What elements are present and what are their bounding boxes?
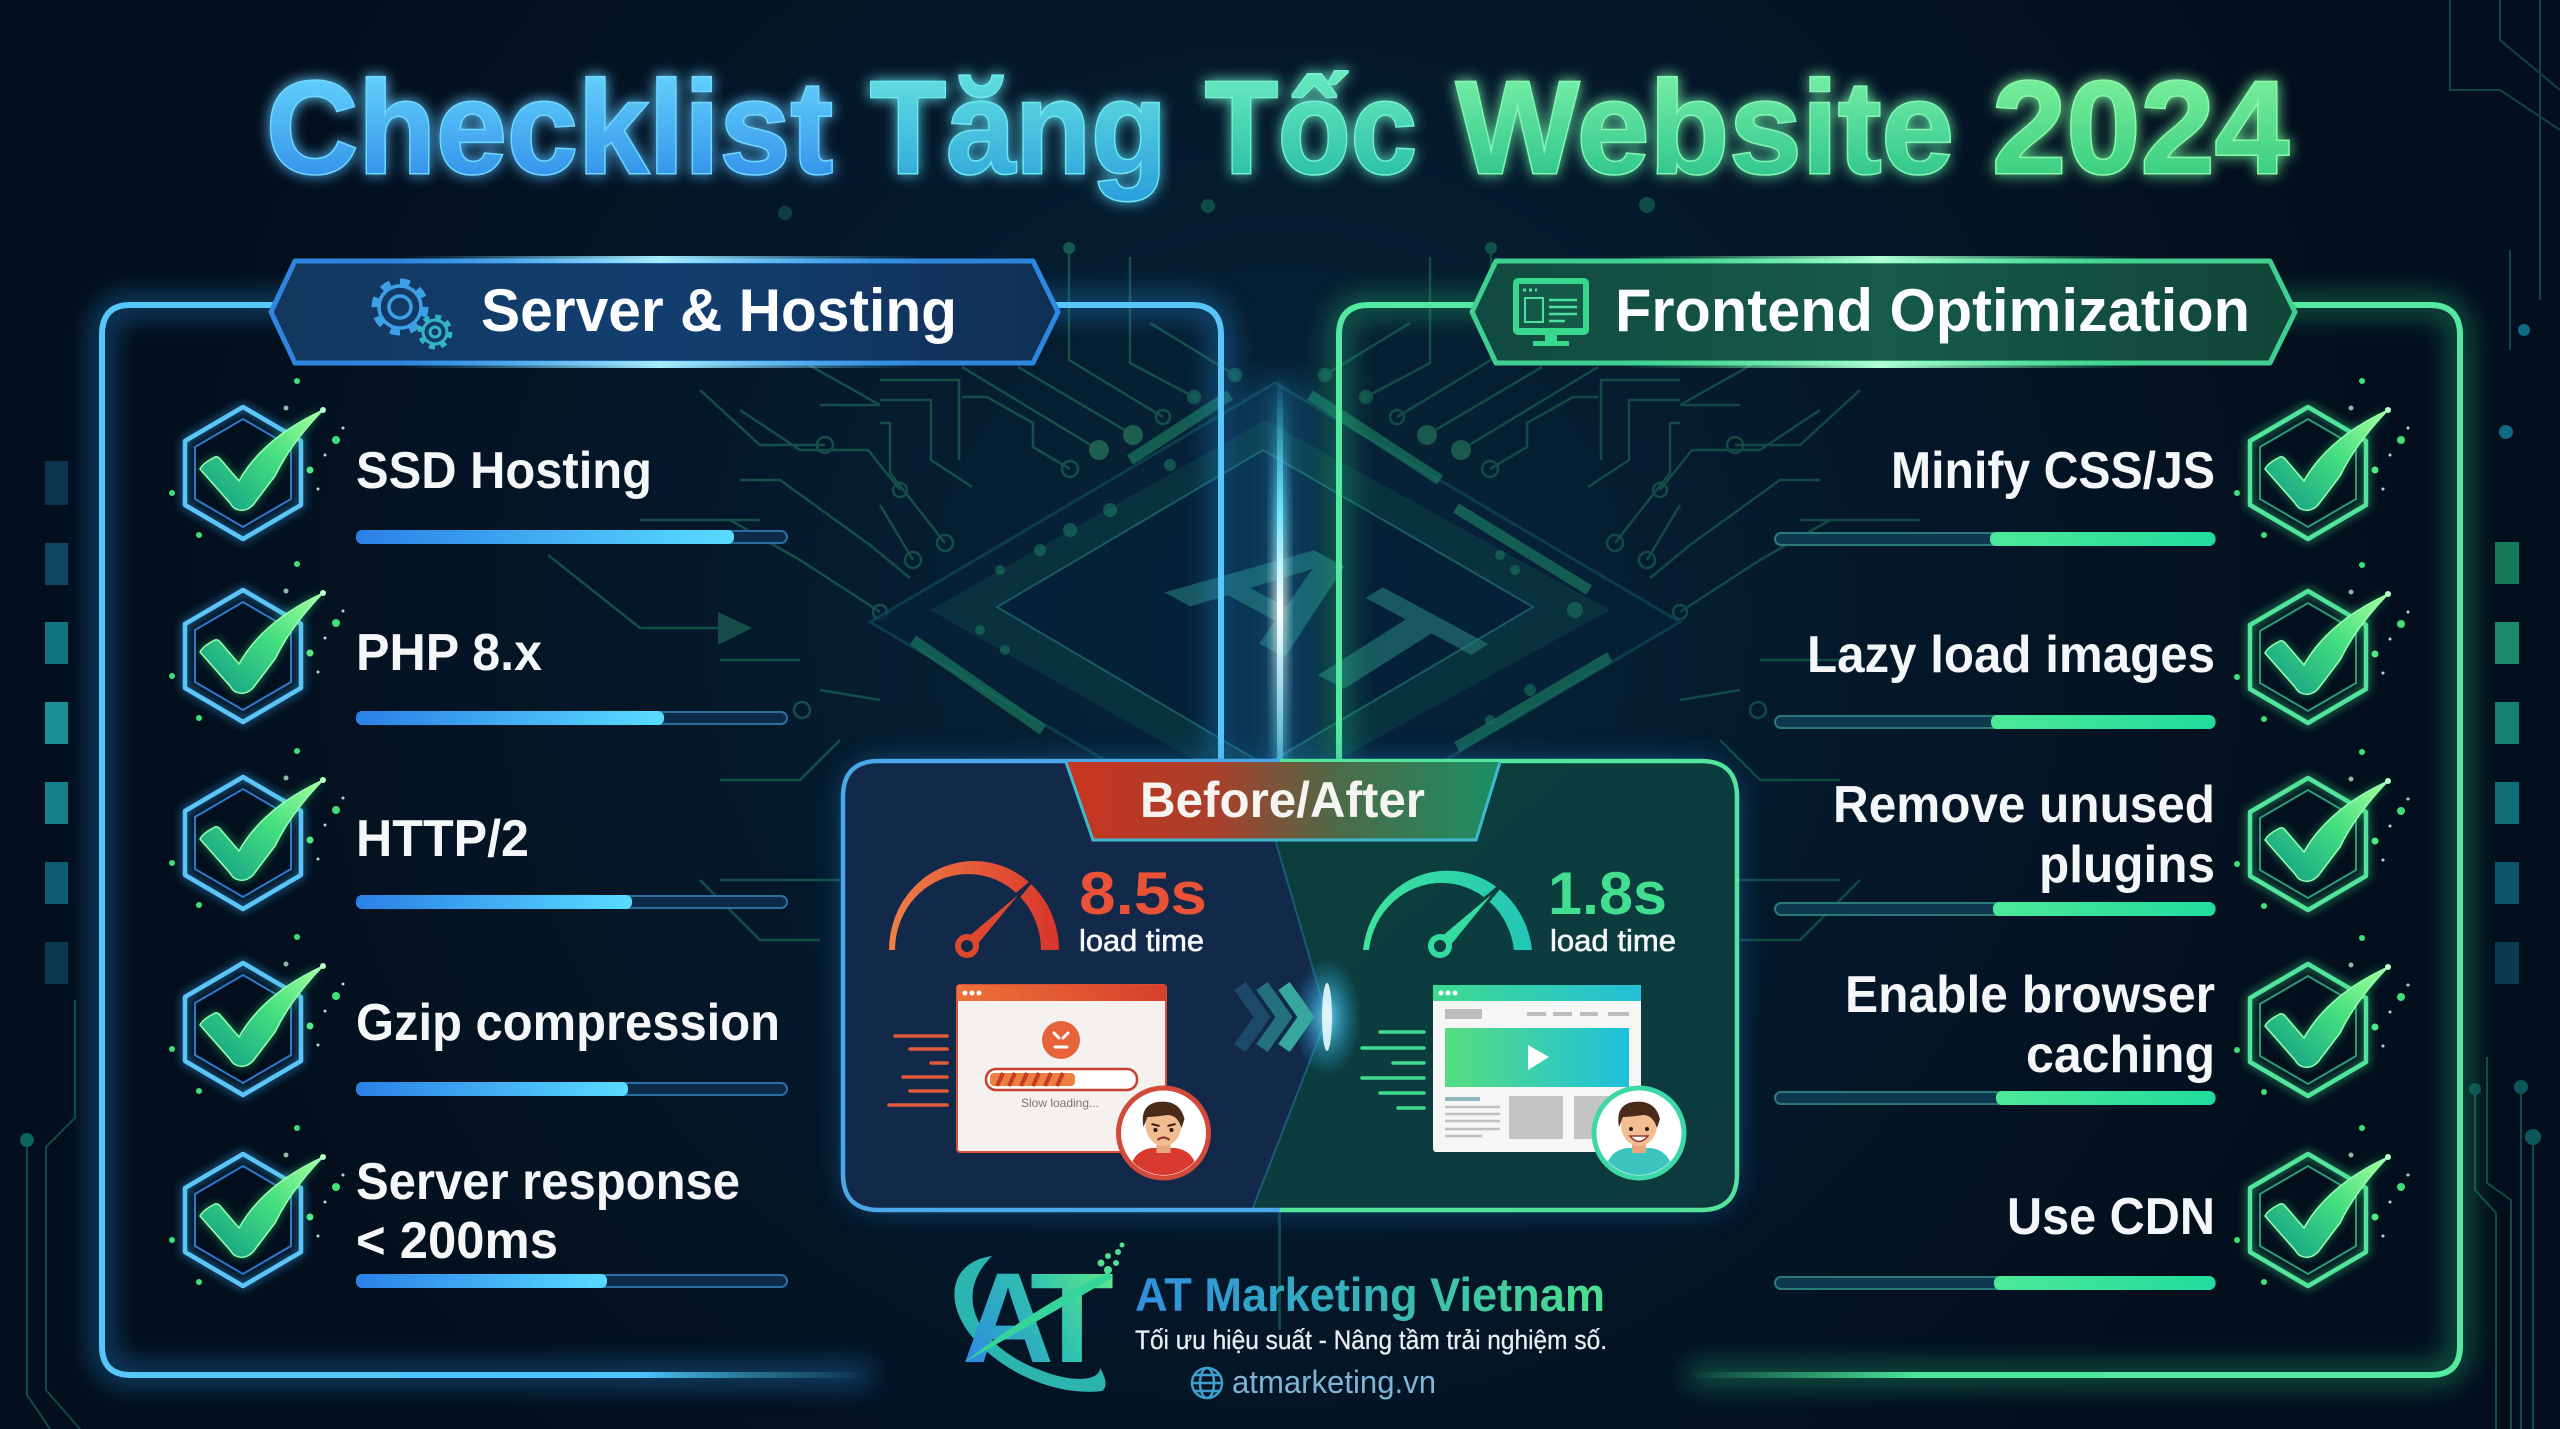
item: Server response < 200ms: [169, 1125, 787, 1288]
item: Use CDN: [1775, 1125, 2410, 1290]
banner: Frontend Optimization: Frontend Optimization: [1615, 277, 2250, 344]
banner: Server & Hosting: Server & Hosting: [481, 277, 957, 344]
panel frame right: [1339, 305, 2460, 1375]
icon: monitor: [1513, 278, 1589, 346]
item: Enable browser caching: Enable browser: [1845, 966, 2215, 1024]
item: PHP 8.x: [169, 561, 787, 725]
gauge: before: [889, 861, 1059, 955]
item: Remove unused plugins: [1775, 749, 2410, 916]
item: SSD Hosting: SSD Hosting: [356, 442, 652, 500]
item: PHP 8.x: PHP 8.x: [356, 624, 542, 682]
panel frame left: [102, 305, 1221, 1375]
item: Enable browser caching: caching: [2026, 1026, 2215, 1084]
icon: globe: [1192, 1368, 1222, 1398]
panel: before/after: [843, 761, 1737, 1210]
item: SSD Hosting: [169, 378, 787, 544]
gauge: after: [1363, 871, 1532, 955]
item: Minify CSS/JS: Minify CSS/JS: [1891, 442, 2215, 500]
item: Lazy load images: Lazy load images: [1807, 626, 2215, 684]
side light bars left: [45, 461, 68, 984]
item: Gzip compression: Gzip compression: [356, 994, 780, 1052]
item: Server response < 200ms: < 200ms: [356, 1212, 558, 1270]
icon: AT emblem: [954, 1242, 1124, 1392]
banner: Server & Hosting: [271, 256, 1058, 368]
stat: 1.8s load time: 1.8s: [1548, 860, 1667, 927]
central chip background: [870, 383, 1680, 860]
item: HTTP/2: [169, 748, 787, 909]
chevrons: [1240, 986, 1306, 1048]
icon: gears: [376, 283, 449, 346]
item: Server response < 200ms: Server response: [356, 1153, 740, 1211]
tab: Before/After: Before/After: [1140, 772, 1425, 828]
item: Lazy load images: [1775, 562, 2410, 729]
stat: 1.8s load time: [1548, 860, 1676, 958]
logo: AT Marketing Vietnam: [954, 1242, 1607, 1400]
item: Remove unused plugins: Remove unused: [1833, 776, 2215, 834]
item: Enable browser caching: [1775, 935, 2410, 1105]
item: HTTP/2: HTTP/2: [356, 810, 529, 868]
item: Remove unused plugins: plugins: [2039, 836, 2215, 894]
title: Tăng: [870, 54, 1167, 201]
title: Tốc: [1205, 54, 1417, 201]
side light bars right: [2495, 542, 2519, 984]
panel: frontend optimization: [1339, 256, 2460, 1375]
browser window: slow loading: [957, 985, 1166, 1152]
item: Minify CSS/JS: [1775, 378, 2410, 546]
logo: AT Marketing Vietnam: Tối ưu hiệu suất - Nâng tầm trải nghiệm số.: [1135, 1325, 1607, 1355]
icon: AT emblem: T: [1030, 1247, 1114, 1390]
browser window: fast site: [1433, 985, 1641, 1152]
title: 2024: [1992, 54, 2289, 201]
speed lines: after: [1362, 1032, 1424, 1108]
avatar: happy user: [1594, 1088, 1684, 1178]
tab: Before/After: [1066, 762, 1500, 840]
stat: 8.5s load time: [1079, 860, 1207, 958]
avatar: unhappy user: [1118, 1088, 1208, 1178]
title: Website: [1456, 54, 1954, 201]
stat: 1.8s load time: load time: [1550, 923, 1676, 958]
logo: AT Marketing Vietnam: atmarketing.vn: [1232, 1364, 1436, 1400]
item: Use CDN: Use CDN: [2007, 1188, 2215, 1246]
icon: AT emblem: A: [962, 1247, 1054, 1390]
title: Checklist: [266, 54, 833, 201]
banner: Frontend Optimization: [1472, 256, 2295, 368]
speed lines: before: [889, 1036, 947, 1105]
stat: 8.5s load time: 8.5s: [1079, 860, 1207, 927]
panel: server & hosting: [102, 256, 1221, 1375]
browser window: slow loading: Slow loading...: [1021, 1096, 1099, 1110]
item: Gzip compression: [169, 934, 787, 1096]
central light beam: [1245, 375, 1315, 1330]
stat: 8.5s load time: load time: [1079, 923, 1204, 958]
logo: AT Marketing Vietnam: AT Marketing Vietnam: [1135, 1268, 1605, 1321]
watermark: AT logo on chip: AT: [1128, 503, 1523, 732]
title: [266, 54, 2289, 201]
